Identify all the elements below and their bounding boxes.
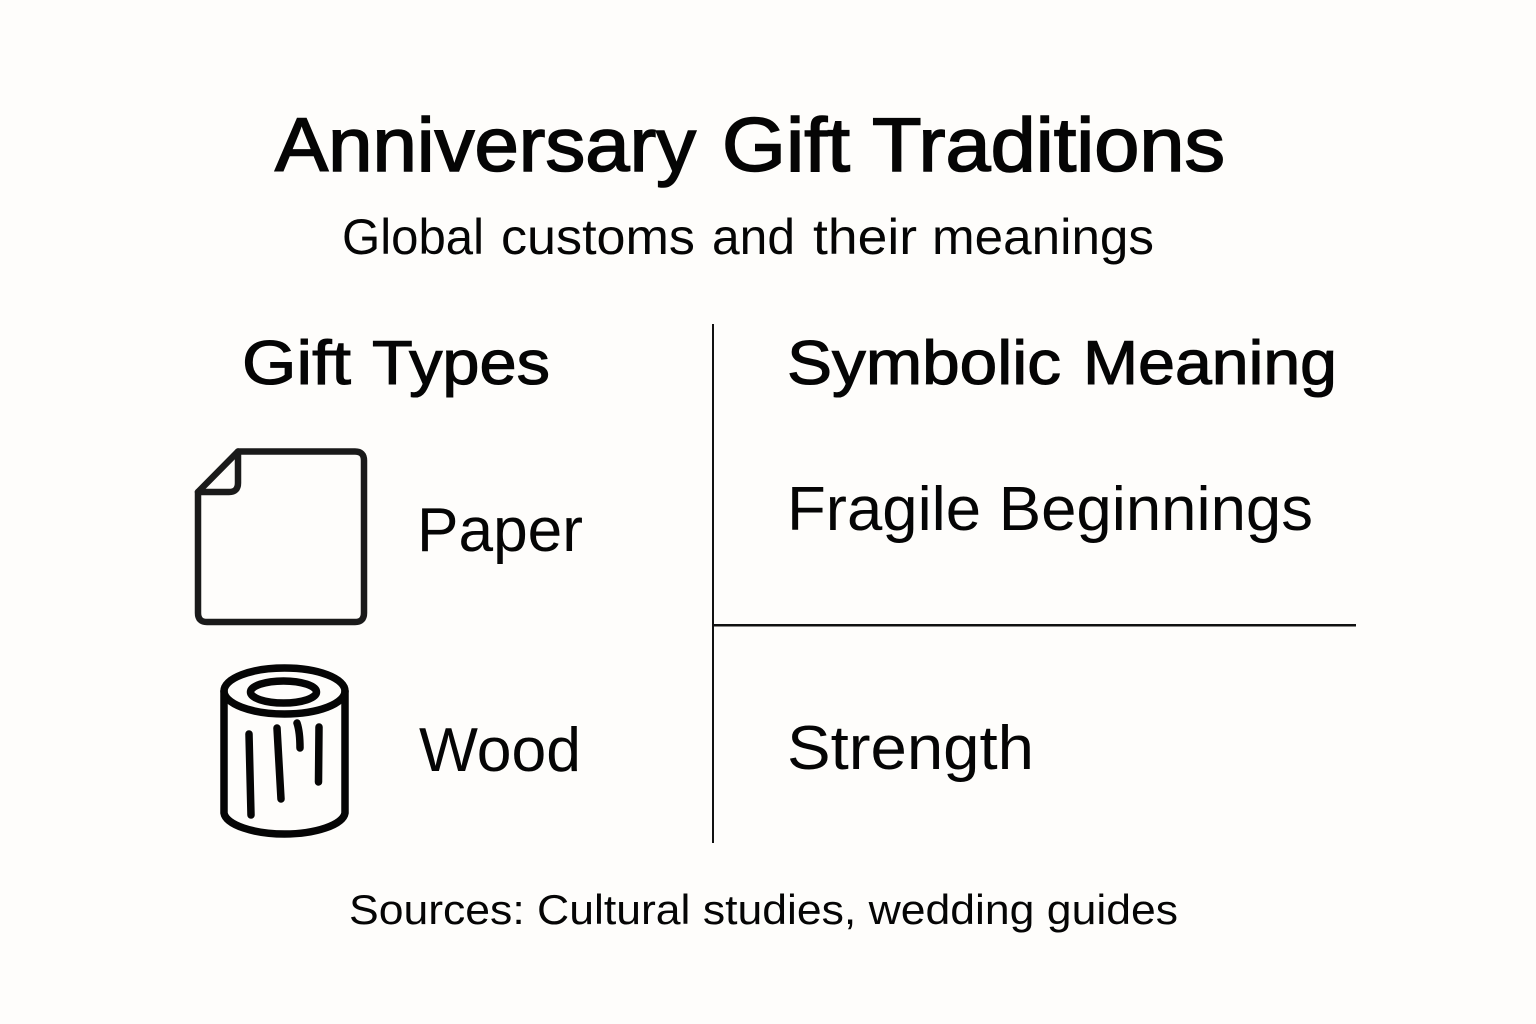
horizontal divider [714,624,1356,626]
meaning: fragile beginnings: Fragile Beginnings [787,475,1313,544]
vertical divider [712,324,714,843]
meaning: strength: Strength [787,714,1034,783]
heading: symbolic meaning: Meaning [1083,329,1337,398]
source note: Sources: Cultural studies, wedding guides [349,886,1178,933]
label: wood: Wood [419,716,581,785]
heading: gift types: Types [372,329,550,398]
heading: gift types: Gift [242,329,351,398]
heading: symbolic meaning: Symbolic [787,329,1061,398]
heading: symbolic meaning [787,329,1337,398]
title: Anniversary [275,103,696,188]
subtitle: meanings [932,209,1154,265]
icon: paper [198,452,364,622]
label: paper: Paper [417,496,583,565]
icon: wood [224,668,345,834]
subtitle: their [813,209,917,265]
title: Traditions [872,103,1225,188]
title: Gift [722,103,850,188]
subtitle [342,209,1154,265]
subtitle: and [712,209,795,265]
subtitle: customs [501,209,695,265]
heading: gift types [242,329,550,398]
title [275,103,1225,188]
subtitle: Global [342,209,484,265]
